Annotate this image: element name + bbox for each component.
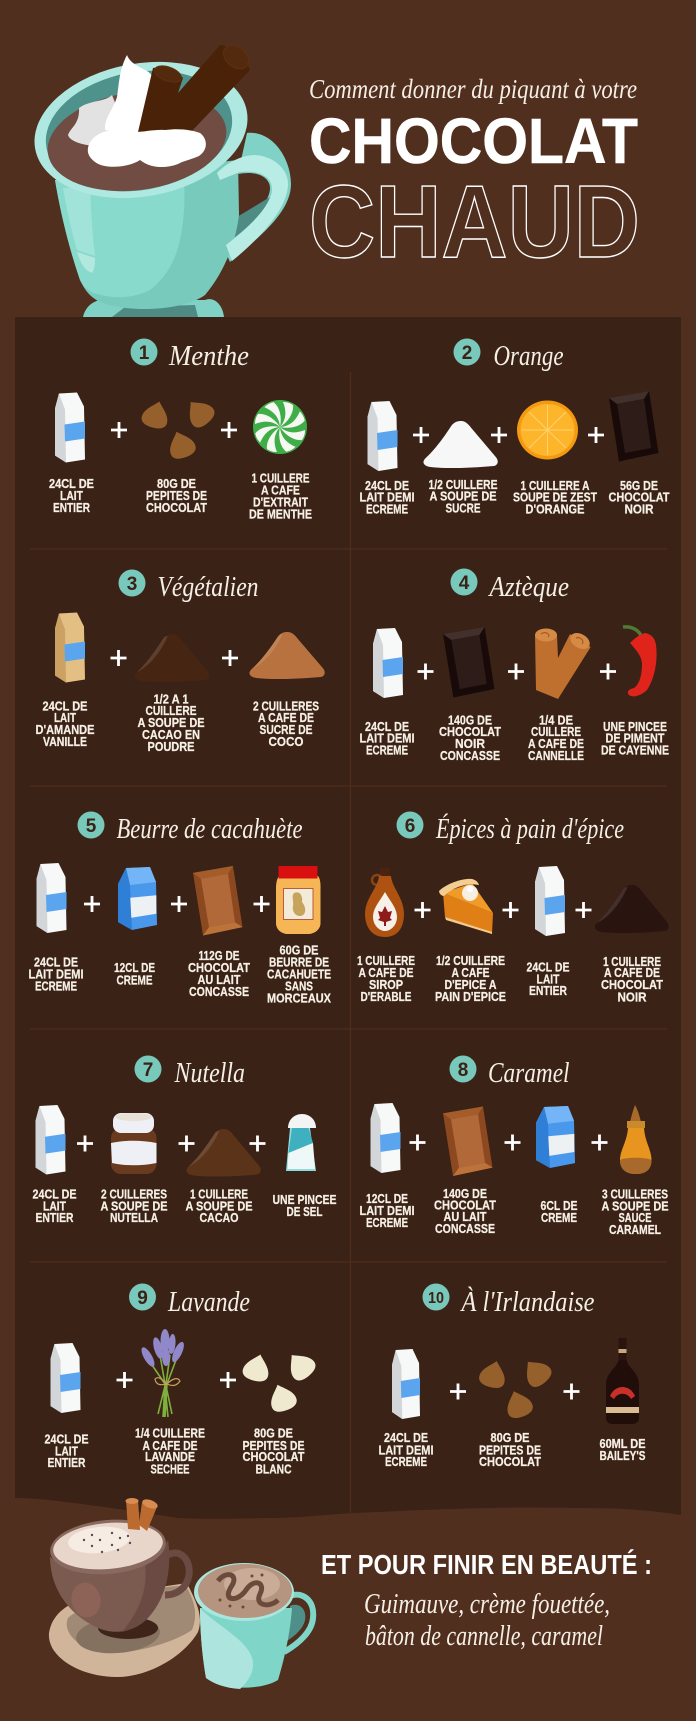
label: AU LAIT (444, 1210, 487, 1224)
label: ECREME (366, 744, 408, 758)
icon: dark chocolate bar (609, 391, 658, 462)
label: 24CL DE (49, 477, 94, 491)
icon: nutella jar (111, 1113, 156, 1174)
label (602, 1188, 668, 1237)
heading 4 (450, 568, 569, 603)
label (267, 944, 332, 1006)
plus (418, 664, 434, 680)
heading 4: Aztèque (488, 572, 569, 603)
label: ECREME (366, 1216, 408, 1230)
label: 12CL DE (366, 1192, 408, 1206)
label: 24CL DE (42, 700, 88, 714)
label (528, 714, 584, 763)
icon: salt shaker (286, 1114, 316, 1171)
label: D'ORANGE (526, 502, 584, 516)
plus (564, 1384, 580, 1400)
label (601, 955, 663, 1004)
recipe 8: caramel (360, 1056, 668, 1237)
label: 140G DE (443, 1187, 487, 1201)
label: LAIT DEMI (360, 490, 414, 504)
label: LAVANDE (145, 1450, 195, 1464)
label: CHOCOLAT (608, 490, 670, 504)
label: SUCRE (446, 502, 480, 516)
icon: cocoa powder pile (135, 634, 209, 682)
recipe 3: vegetalien (36, 570, 325, 754)
label: NOIR (624, 502, 654, 516)
label (32, 1188, 76, 1225)
label: BAILEY'S (600, 1449, 646, 1463)
label (434, 1187, 496, 1236)
label: NOIR (455, 737, 485, 751)
plus (576, 902, 592, 918)
label: 24CL DE (32, 1188, 76, 1202)
plus (410, 1134, 426, 1150)
recipe 9: lavande (44, 1284, 319, 1476)
heading 8: 8 (458, 1060, 468, 1081)
plus (600, 664, 616, 680)
label: PEPITES DE (146, 489, 207, 503)
label (360, 720, 414, 758)
plus (254, 896, 270, 912)
label: 80G DE (157, 477, 196, 491)
label (242, 1426, 305, 1476)
heading 7: 7 (143, 1060, 153, 1081)
heading 9: Lavande (167, 1287, 250, 1318)
label: CANNELLE (528, 749, 584, 763)
icon: brown coffee cup on saucer (48, 1498, 200, 1677)
label: 80G DE (490, 1431, 530, 1445)
heading 9: 9 (137, 1288, 148, 1309)
label: A CAFE DE (604, 966, 660, 980)
heading 2: Orange (494, 341, 564, 372)
icon: chocolate chips (477, 1353, 555, 1421)
label: 24CL DE (365, 479, 409, 493)
icon: chili pepper (623, 627, 657, 696)
label: CHOCOLAT (479, 1455, 541, 1469)
heading 7 (134, 1056, 245, 1089)
label: 60G DE (280, 944, 318, 958)
plus (116, 1372, 132, 1388)
label: LAIT DEMI (360, 1204, 414, 1218)
heading 5 (78, 812, 302, 845)
label: VANILLE (43, 735, 87, 749)
label (272, 1193, 336, 1219)
label: CREME (116, 974, 152, 988)
heading 3 (118, 570, 258, 603)
icon: lavender bunch (139, 1329, 186, 1417)
plus (110, 650, 126, 666)
plus (178, 1136, 194, 1152)
label: D'AMANDE (36, 723, 94, 737)
label: ENTIER (36, 1211, 74, 1225)
label: LAIT DEMI (378, 1444, 434, 1458)
label: CACAHUETE (267, 968, 331, 982)
label: SUCRE DE (260, 723, 312, 737)
label (36, 700, 94, 749)
label (479, 1431, 541, 1469)
heading 6 (396, 812, 624, 845)
icon: milk (36, 863, 66, 933)
label: A SOUPE DE (138, 716, 204, 730)
label: 24CL DE (44, 1432, 88, 1446)
label: 56G DE (620, 479, 658, 493)
plus (250, 1136, 266, 1152)
heading 6: 6 (405, 816, 415, 837)
plus (588, 427, 604, 443)
icon: cream carton (536, 1106, 575, 1168)
icon: coconut sugar pile (249, 632, 325, 679)
heading 7: Nutella (174, 1058, 245, 1089)
recipe 10: a l'irlandaise (378, 1284, 646, 1469)
label: 6CL DE (540, 1199, 578, 1213)
label: ECREME (35, 980, 77, 994)
label: CONCASSE (189, 985, 249, 999)
icon: orange slice (517, 400, 578, 460)
label: CHOCOLAT (434, 1198, 496, 1212)
label (513, 479, 597, 516)
plus (413, 427, 429, 443)
icon: milk chocolate bar (443, 1106, 492, 1176)
label: 1 CUILLERE (190, 1188, 248, 1202)
label: SECHEE (150, 1462, 190, 1476)
label: 2 CUILLERES (253, 700, 319, 714)
plus (77, 1136, 93, 1152)
label: 1 CUILLERE (252, 472, 310, 486)
heading 1: Menthe (168, 341, 249, 372)
icon: cream carton (118, 867, 157, 930)
plus (414, 902, 430, 918)
label: UNE PINCEE (603, 720, 667, 734)
label: DE SEL (286, 1205, 323, 1219)
label: 24CL DE (34, 956, 78, 970)
icon: cocoa pile (186, 1129, 261, 1177)
label: A CAFE DE (528, 737, 584, 751)
label: 1/2 A 1 (154, 692, 189, 706)
label: A CAFE DE (142, 1439, 198, 1453)
label: LAIT (43, 1200, 66, 1214)
label: SIROP (369, 978, 403, 992)
plus (592, 1134, 608, 1150)
label: PEPITES DE (479, 1444, 541, 1458)
label: CACAO (200, 1211, 239, 1225)
label: AU LAIT (198, 973, 241, 987)
icon: large teal mug with whipped cream and cinnamon (24, 40, 291, 317)
icon: cinnamon sticks (535, 628, 593, 699)
label: LAIT (60, 489, 83, 503)
label: LAIT DEMI (360, 732, 414, 746)
label: 12CL DE (114, 961, 155, 975)
closing text line 1: Guimauve, crème fouettée, (364, 1589, 610, 1620)
icon: milk (368, 401, 398, 471)
label: LAIT (536, 972, 560, 986)
heading 2: 2 (462, 343, 472, 364)
label: NUTELLA (110, 1211, 158, 1225)
title: subtitle line: Comment donner du piquant à votre (309, 74, 637, 104)
label: 1/2 CUILLERE (436, 954, 505, 968)
icon: baileys bottle (606, 1338, 639, 1424)
recipe 7: nutella (32, 1056, 336, 1225)
icon: milk (50, 1343, 80, 1413)
icon: peanut butter jar (276, 866, 321, 934)
label: D'ERABLE (360, 990, 412, 1004)
label (526, 960, 570, 998)
label: CUILLERE (531, 725, 581, 739)
icon: teal cup with chocolate swirl (194, 1563, 313, 1689)
recipe 2: orange (360, 338, 670, 516)
label: A SOUPE DE (186, 1200, 252, 1214)
label: CUILLERE (146, 704, 196, 718)
plus (508, 664, 524, 680)
label (44, 1432, 88, 1470)
label: 112G DE (198, 949, 240, 963)
plus (222, 650, 238, 666)
label: COCO (268, 735, 304, 749)
label: A CAFE DE (258, 711, 314, 725)
label: DE MENTHE (249, 508, 312, 522)
icon: chocolate chips (140, 394, 218, 462)
label: 24CL DE (365, 720, 409, 734)
label (28, 956, 84, 994)
recipe 6: epices a pain d'epice (357, 812, 669, 1004)
closing text line 2: bâton de cannelle, caramel (365, 1621, 603, 1652)
icon: pumpkin pie slice (439, 879, 493, 934)
label: SOUPE DE ZEST (513, 490, 597, 504)
label: A SOUPE DE (100, 1200, 168, 1214)
label (100, 1188, 168, 1225)
label (608, 479, 670, 516)
plus (111, 422, 127, 438)
icon: maple syrup (365, 868, 404, 937)
icon: dark cocoa pile (595, 885, 669, 933)
recipe 1: menthe (49, 338, 312, 522)
label: 24CL DE (384, 1431, 428, 1445)
label: CACAO EN (142, 728, 200, 742)
heading 8 (450, 1056, 570, 1089)
heading 10: À l'Irlandaise (460, 1287, 594, 1318)
label: 2 CUILLERES (101, 1188, 167, 1202)
label: 1 CUILLERE (603, 955, 661, 969)
label (600, 1437, 646, 1463)
label (253, 700, 319, 749)
label (186, 1188, 252, 1225)
label: 1 CUILLERE A (520, 479, 590, 493)
recipe 5: beurre de cacahuete (28, 812, 332, 1006)
label: BEURRE DE (269, 956, 329, 970)
label: ENTIER (48, 1456, 86, 1470)
heading 3: Végétalien (158, 572, 258, 603)
heading 10 (422, 1284, 594, 1318)
label: DE PIMENT (606, 732, 665, 746)
label: MORCEAUX (267, 992, 332, 1006)
plus (504, 1134, 520, 1150)
label: A CAFE (261, 484, 300, 498)
heading 5: 5 (86, 816, 97, 837)
label: 1/2 CUILLERE (428, 478, 498, 492)
label (249, 472, 312, 522)
label: 1 CUILLERE (357, 954, 415, 968)
grid dividers (30, 372, 667, 1513)
icon: milk chocolate bar (193, 866, 242, 936)
label (49, 477, 94, 515)
label (601, 720, 669, 758)
label: 3 CUILLERES (602, 1188, 668, 1202)
label: UNE PINCEE (272, 1193, 336, 1207)
plus (171, 896, 187, 912)
label: ENTIER (53, 501, 90, 515)
icon: milk (36, 1105, 66, 1174)
label (357, 954, 415, 1004)
label: LAIT (55, 1444, 78, 1458)
label: SANS (285, 980, 313, 994)
plus (84, 896, 100, 912)
label (114, 961, 155, 988)
label: CHOCOLAT (601, 978, 663, 992)
label: ENTIER (529, 984, 567, 998)
label: CHOCOLAT (439, 725, 501, 739)
icon: milk (370, 1103, 400, 1173)
label: ECREME (385, 1455, 427, 1469)
icon: white chocolate chips (241, 1347, 319, 1415)
label: A CAFE (452, 966, 490, 980)
heading 4: 4 (459, 573, 470, 594)
label (378, 1431, 434, 1469)
icon: almond milk (55, 612, 85, 682)
label: 80G DE (254, 1426, 293, 1440)
label: 1/4 CUILLERE (135, 1426, 205, 1440)
label (540, 1199, 578, 1225)
plus (220, 1372, 236, 1388)
icon: peppermint candy (253, 400, 307, 454)
plus (491, 427, 507, 443)
label: 60ML DE (600, 1437, 646, 1451)
heading 1 (130, 338, 249, 372)
label: NOIR (618, 990, 646, 1004)
title: chocolat: CHOCOLAT (309, 105, 638, 177)
label: DE CAYENNE (601, 744, 669, 758)
label (360, 1192, 414, 1230)
label: D'EPICE A (444, 978, 496, 992)
label (146, 477, 207, 515)
heading 6: Épices à pain d'épice (435, 814, 624, 845)
label: CHOCOLAT (146, 501, 207, 515)
icon: milk (373, 628, 403, 698)
heading 8: Caramel (488, 1058, 570, 1089)
plus (450, 1384, 466, 1400)
heading 5: Beurre de cacahuète (116, 814, 302, 845)
label: 1/4 DE (539, 714, 573, 728)
label: BLANC (256, 1462, 292, 1476)
label: LAIT DEMI (28, 968, 84, 982)
icon: sugar pile (423, 421, 498, 468)
heading 1: 1 (139, 343, 150, 364)
label: ECREME (366, 502, 408, 516)
label: CONCASSE (435, 1222, 495, 1236)
plus (221, 422, 237, 438)
label: A SOUPE DE (602, 1200, 668, 1214)
label: PEPITES DE (242, 1439, 304, 1453)
icon: caramel sauce bottle (620, 1105, 652, 1174)
label: 140G DE (448, 714, 492, 728)
label (435, 954, 506, 1004)
heading 3: 3 (127, 574, 137, 595)
icon: milk (535, 866, 565, 936)
title: chaud outlined: CHAUD (309, 164, 640, 279)
recipe 4: azteque (360, 568, 669, 763)
label: LAIT (54, 711, 76, 725)
label (428, 478, 498, 516)
label (188, 949, 250, 999)
plus (502, 902, 518, 918)
icon: milk (55, 392, 85, 462)
heading 2 (454, 338, 564, 372)
label: CHOCOLAT (188, 961, 250, 975)
label: SAUCE (618, 1211, 652, 1225)
label: PAIN D'EPICE (435, 990, 506, 1004)
icon: milk (392, 1349, 420, 1419)
label (135, 1426, 205, 1476)
label (138, 692, 204, 754)
label: POUDRE (148, 740, 194, 754)
label: CARAMEL (609, 1223, 661, 1237)
label: 24CL DE (526, 960, 570, 974)
label: D'EXTRAIT (253, 496, 308, 510)
icon: dark chocolate bar (443, 627, 494, 698)
label: CONCASSE (440, 749, 500, 763)
label: CREME (541, 1211, 577, 1225)
label: CHOCOLAT (242, 1450, 305, 1464)
panel: recipes (15, 317, 681, 1519)
label (439, 714, 501, 763)
heading 10: 10 (428, 1290, 444, 1307)
label: A CAFE DE (358, 966, 414, 980)
heading 9 (129, 1284, 250, 1318)
label (360, 479, 414, 516)
label: A SOUPE DE (430, 490, 496, 504)
